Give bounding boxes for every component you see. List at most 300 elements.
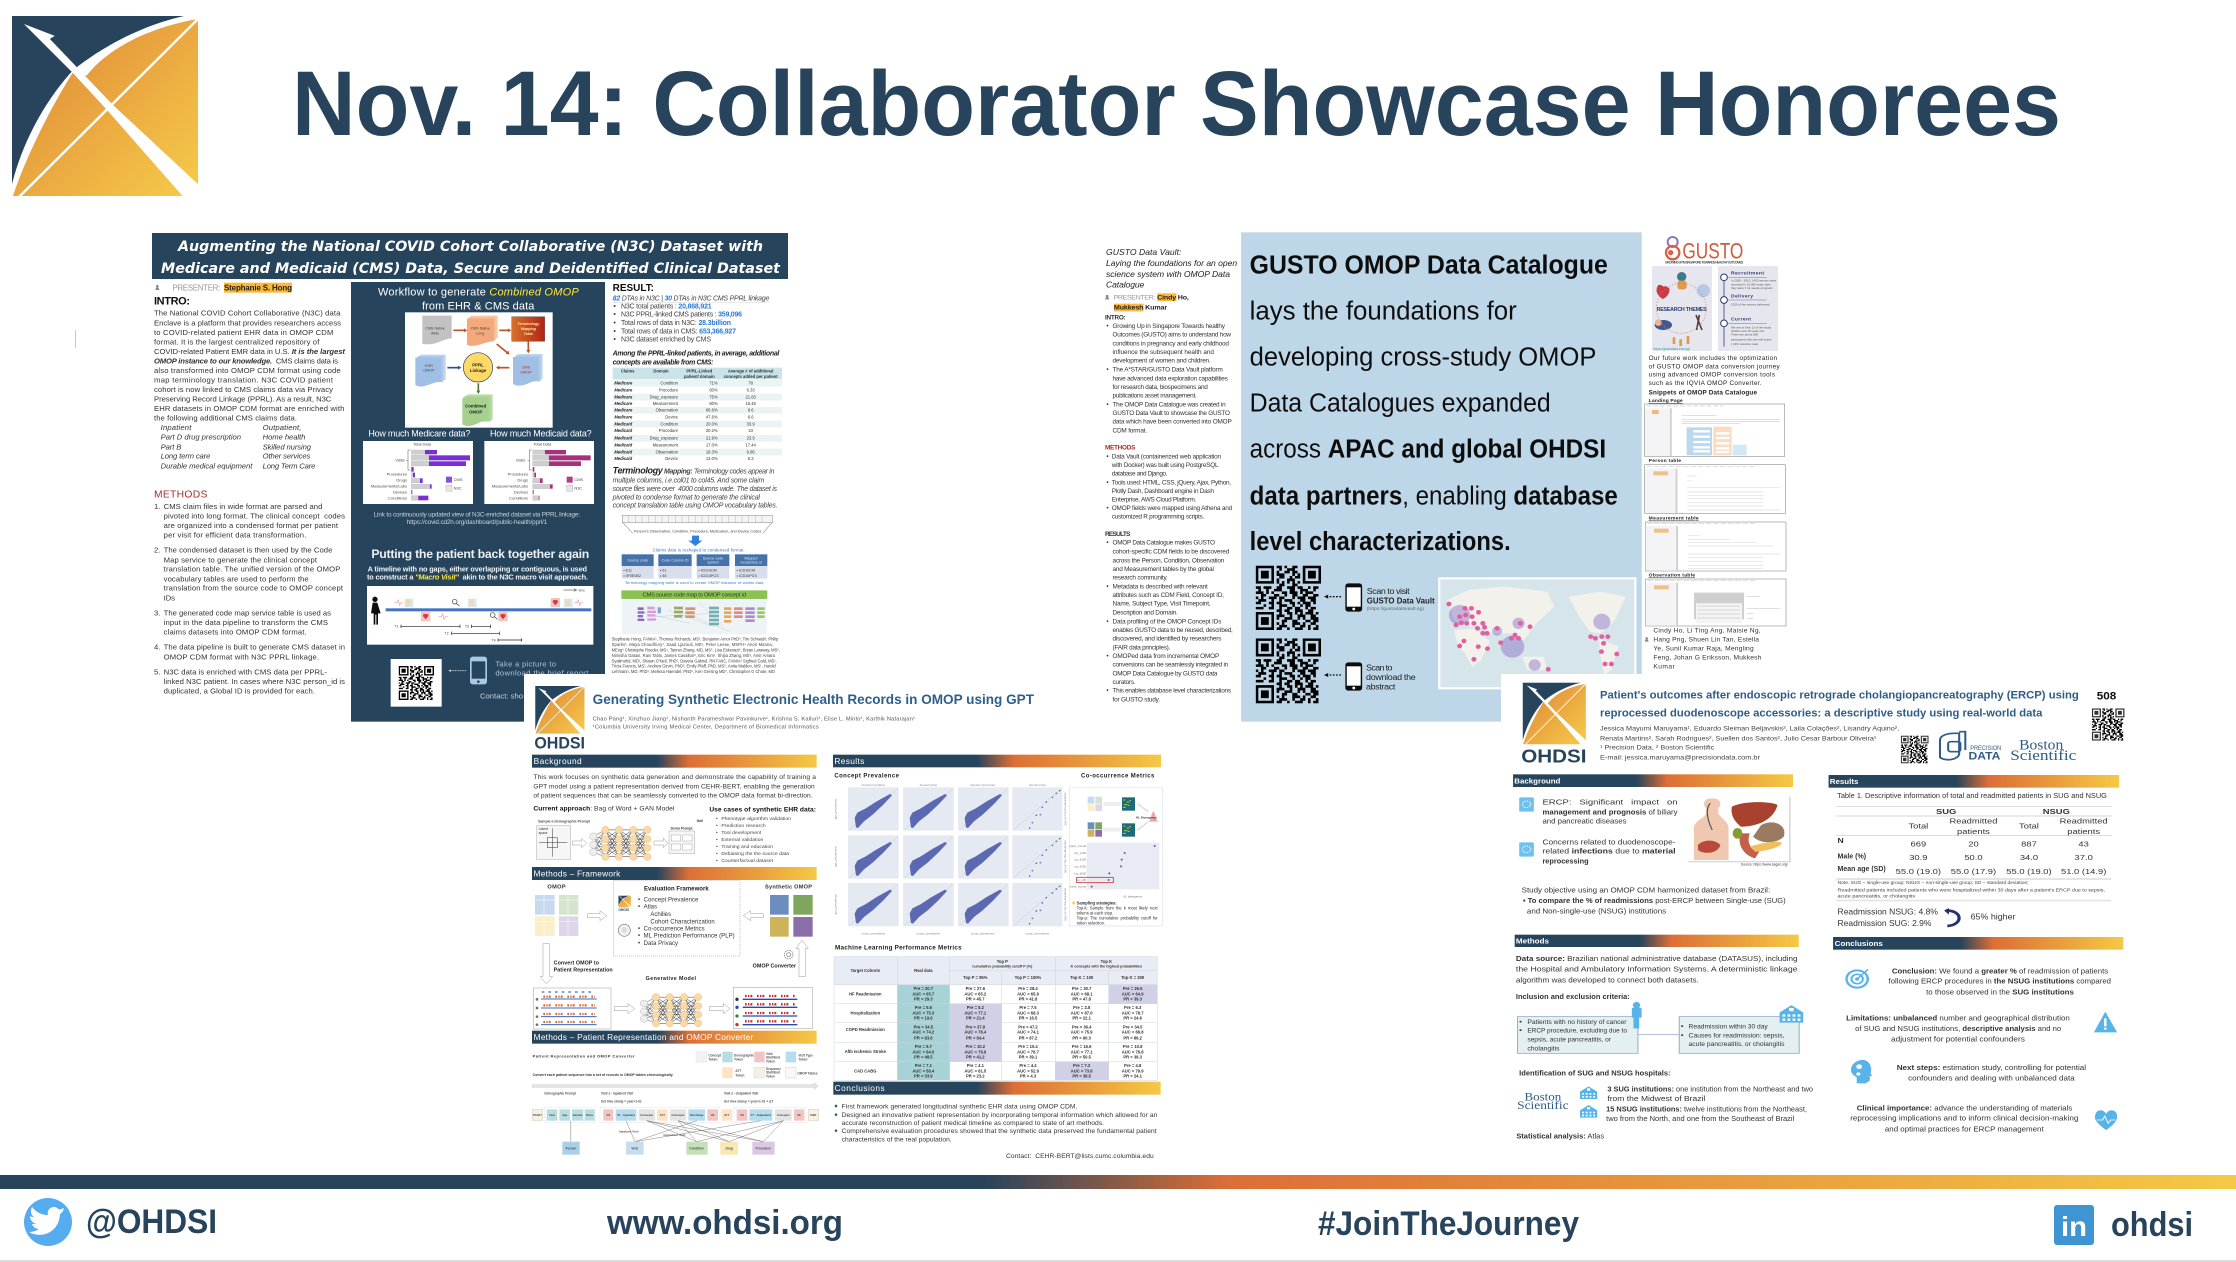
table: ml performance metrics: AUC = 64.9 <box>1122 991 1144 996</box>
token sequence: VS <box>740 1113 744 1117</box>
table: ml performance metrics: Pre = 36.4 <box>1072 1024 1092 1029</box>
table 1: Note. SUG – single-use group; NSUG – non-single-use group; SD – standard deviation; <box>1838 880 2029 886</box>
table: concepts per domain: 6.3 <box>748 456 754 461</box>
scatter chart grid: concept prevalence: sampling=top-foo_k=100 <box>1063 888 1067 921</box>
workflow heading <box>378 287 579 312</box>
terminology paragraph: source files were over 4000 columns wide. The dataset is <box>613 486 777 493</box>
gusto intro: • <box>1106 323 1109 330</box>
study timeline panel: Current <box>1731 316 1751 322</box>
table: concepts per domain: Procedure <box>659 387 679 392</box>
table: ml performance metrics: AUC = 77.1 <box>1071 1049 1093 1054</box>
results bar <box>1829 775 2119 788</box>
poster 4 title: Patient's outcomes after endoscopic retrograde cholangiopancreatography (ERCP) using <box>1600 688 2079 701</box>
terminology mapping diagram: • 0F0E0B2 <box>623 574 641 578</box>
methods bar: Methods <box>1516 937 1549 945</box>
co-occurrence panel: upper_bound <box>1069 844 1086 848</box>
token sequence: Concepts <box>640 1113 654 1117</box>
table: ml performance metrics: PR = 29.3 <box>914 997 933 1002</box>
conclusions list: First framework generated longitudinal synthetic EHR data using OMOP CDM. <box>842 1103 1077 1110</box>
methods list: N3C data is enriched with CMS data per PPRL- <box>164 667 327 676</box>
patient timeline diagram: T3 <box>465 625 469 629</box>
table: concepts per domain: Observation <box>656 408 679 413</box>
table 1: 887 <box>2021 840 2037 848</box>
table: concepts per domain: 71% <box>709 381 718 386</box>
gusto intro: Outcomes (GUSTO) aims to understand how <box>1112 332 1232 339</box>
background text: and pancreatic diseases <box>1542 817 1627 825</box>
generative model network <box>640 994 702 1027</box>
table: ml performance metrics: AUC = 76.7 <box>1017 1049 1040 1054</box>
authors: Lehmann, MD, PhD¹, Melissa Haendel, PhD⁶, Ken Gersing MD⁷, Christopher G Chute, MD <box>612 669 775 674</box>
limitations <box>1846 1012 2117 1043</box>
future work paragraph: Our future work includes the optimization <box>1649 355 1777 362</box>
conclusion statement: Conclusion: We found a greater % of readmission of patients <box>1892 967 2108 975</box>
conclusions list: Comprehensive evaluation procedures showed that the synthetic data preserved the fundamental patient <box>842 1128 1157 1135</box>
co-occurrence panel: KL Divergence <box>1136 815 1157 819</box>
gusto results: curators. <box>1112 679 1136 686</box>
workflow diagram: Mapping <box>521 327 537 331</box>
next steps: Next steps: estimation study, controlling for potential <box>1897 1064 2086 1072</box>
intro list <box>161 423 315 470</box>
limitations: adjustment for potential confounders <box>1891 1035 2025 1043</box>
table: ml performance metrics: Pre = 30.7 <box>1072 986 1092 991</box>
use case list: Tool development <box>721 830 762 836</box>
table: ml performance metrics: Pre = 10.8 <box>1123 1044 1143 1049</box>
intro body: to COVID-related patient EHR data in OMOP CDM <box>154 328 333 337</box>
methods list: claims datasets into OMOP CDM format. <box>164 628 307 637</box>
gusto right column <box>1645 237 1786 671</box>
token legend: Token <box>798 1058 807 1062</box>
table: ml performance metrics: PR = 41.8 <box>1019 997 1038 1002</box>
table 1: SUG <box>1936 807 1957 816</box>
bar chart: medicare <box>363 441 473 504</box>
intro body: Enclave is a platform that provides researchers access <box>154 318 341 327</box>
gusto poster title: science system with OMOP Data <box>1106 269 1230 279</box>
token sequence: ATT <box>660 1113 665 1117</box>
table 1: Mean age (SD) <box>1838 865 1886 873</box>
co-occurrence panel: top_p100 <box>1074 851 1086 855</box>
ohdsi logo <box>1521 683 1587 767</box>
authors: Tricia Francis, MS¹, Andrew Girvin, PhD³, Emily Pfaff, PhD, MS⁵, Anita Walden, MS¹, Harold <box>612 664 776 669</box>
patient timeline diagram: T1 <box>395 625 399 629</box>
clinical importance <box>1850 1104 2117 1133</box>
table: concepts per domain: Observation <box>656 449 679 454</box>
precision data logo: PRECISION <box>1970 744 2001 752</box>
table: ml performance metrics: Pre = 7.1 <box>915 1063 933 1068</box>
qr: precision data <box>1901 736 1929 763</box>
study timeline panel: recruited in 10,000 study sites <box>1731 282 1771 286</box>
results headings <box>834 774 1155 780</box>
poster: N3C CMS augmentation <box>152 233 788 722</box>
table: concepts per domain: Measurement <box>653 442 679 447</box>
result metrics: • <box>613 310 616 319</box>
gusto methods: • <box>1106 480 1109 486</box>
table: ml performance metrics: AUC = 87.0 <box>1071 1010 1093 1015</box>
poster 1 title banner <box>152 233 788 279</box>
scatter chart grid: concept prevalence: omop_prevalence <box>971 931 995 935</box>
table: ml performance metrics: AUC = 77.1 <box>964 1010 987 1015</box>
identification of hospitals: from the Midwest of Brazil <box>1607 1095 1706 1103</box>
table: ml performance metrics: AUC = 68.1 <box>1071 991 1093 996</box>
gusto results: attributes such as CDM Field, Concept ID, <box>1112 592 1224 599</box>
evaluation framework box: OHDSI <box>618 908 629 912</box>
scan labels: download the <box>1366 672 1416 682</box>
gusto presenter: Mukkesh Kumar <box>1114 305 1167 312</box>
study timeline panel: Recruitment <box>1731 271 1764 277</box>
table: ml performance metrics: PR = 22.1 <box>1072 1016 1092 1021</box>
gusto results: OMOPed data from incremental OMOP <box>1112 653 1219 660</box>
intro body: EHR datasets in OMOP CDM format are enriched with <box>154 404 344 413</box>
table: ml performance metrics: AUC = 81.5 <box>964 1068 987 1073</box>
token legend: Start/End <box>766 1071 780 1075</box>
table 1: 43 <box>2078 840 2089 848</box>
take a picture text <box>480 659 589 701</box>
framework labels: Generative Model <box>646 976 697 982</box>
background section bar: Background <box>534 756 582 766</box>
criteria flow: Causes for readmission: sepsis, <box>1689 1031 1784 1039</box>
screenshot: measurement table <box>1645 515 1786 571</box>
background text <box>533 774 816 814</box>
terminology mapping diagram: Code Column ID <box>661 559 689 563</box>
token legend: Token <box>708 1058 717 1062</box>
footer gradient band <box>0 1175 2236 1189</box>
gusto methods: Tools used: HTML, CSS, jQuery, Ajax, Python, <box>1112 480 1231 486</box>
gusto intro: conditions in pregnancy and early childhood <box>1112 341 1229 347</box>
gusto authors: Hang Png, Shuen Lin Tan, Estella <box>1653 637 1759 644</box>
gusto results: OMOP Data Catalogue by GUSTO data <box>1112 671 1218 677</box>
data source: Data source: Brazilian national administrative database (DATASUS), including <box>1516 954 1798 963</box>
future work paragraph: such as the IQVIA OMOP Converter. <box>1649 380 1762 387</box>
criteria flow: cholangitis <box>1527 1044 1560 1052</box>
gusto main statement: GUSTO OMOP Data Catalogue <box>1250 250 1608 279</box>
co-occurrence panel: Top-p: The cumulative probability cutoff for <box>1077 916 1158 921</box>
workflow diagram: Terminology <box>517 322 540 326</box>
gusto blue centre panel <box>1241 232 1642 722</box>
table: concepts per domain: Medicare <box>614 381 633 386</box>
methods list: vocabulary tables are used to perform the <box>164 574 309 583</box>
medicare medicaid headings: How much Medicaid data? <box>490 429 592 439</box>
bar chart: medicare: Conditions <box>388 495 407 500</box>
scan labels: abstract <box>1366 682 1396 692</box>
table: ml performance metrics: Pre = 28.4 <box>1018 986 1038 991</box>
terminology mapping diagram: Source code <box>627 559 648 563</box>
co-occurrence panel: Top-k: Sample from the k most likely next <box>1077 906 1159 911</box>
gusto results: conversions can be seamlessly integrated in <box>1112 662 1229 669</box>
world map of data partners <box>1439 578 1635 688</box>
table: ml performance metrics: HF Readmission <box>849 991 882 996</box>
table: ml performance metrics: PR = 24.6 <box>1123 1016 1143 1021</box>
token legend: Sequence <box>766 1067 781 1071</box>
table: ml performance metrics: AUC = 73.6 <box>1071 1068 1093 1073</box>
table 1: acute pancreatitis, or cholangitis <box>1838 894 1916 899</box>
table 1: patients <box>2067 827 2100 836</box>
token sequence: VT - Inpatient <box>617 1113 635 1117</box>
table: concepts per domain: 6.33 <box>747 387 755 392</box>
identification of hospitals: 3 SUG institutions: one institution from the Northeast and two <box>1607 1085 1814 1093</box>
screenshot: observation table: Observation table <box>1649 572 1695 578</box>
table: ml performance metrics: Top K = 300 <box>1121 975 1145 980</box>
future work paragraph: of GUSTO OMOP data conversion journey <box>1649 363 1780 370</box>
gusto methods: Plotly Dash, Dashboard engine in Dash <box>1112 488 1214 495</box>
criteria flow: Readmission within 30 day <box>1689 1022 1768 1030</box>
scatter chart grid: concept prevalence: sampling=top-foo_k=100 <box>1063 793 1067 826</box>
token legend: Start/End <box>766 1056 780 1060</box>
methods list: The condensed dataset is then used by the Code <box>164 546 332 555</box>
table 1: Readmitted <box>2060 817 2108 825</box>
gusto presenter: PRESENTER: <box>1114 295 1155 301</box>
authors: Sparks¹, Maya Choudhury¹, Saad Ljazouli, MS¹, Peter Leese, MSPH⁴ Anoir Manna, <box>612 642 773 647</box>
gusto methods: with Docker) was built using PostgreSQL <box>1111 462 1219 469</box>
workflow heading: Workflow to generate Combined OMOP <box>378 287 579 299</box>
table: concepts per domain: Condition <box>660 381 679 386</box>
patient timeline diagram: T2 <box>445 632 449 636</box>
ohdsi logo <box>534 686 585 753</box>
qr: data vault <box>1256 566 1321 630</box>
terminology paragraph: Terminology Mapping: Terminology codes appear in <box>613 466 774 476</box>
intro body: Preserving Record Linkage (PPRL). As a result, N3C <box>154 395 332 404</box>
table: ml performance metrics: PR = 33.9 <box>914 1074 933 1079</box>
table: ml performance metrics: AUC = 78.7 <box>1122 1010 1144 1015</box>
token sequence: Concepts <box>672 1113 685 1117</box>
bar chart: medicare: Procedures <box>387 472 407 477</box>
boston scientific logo: Scientific <box>2010 747 2076 764</box>
synthetic omop tables <box>765 884 813 937</box>
token legend: Token <box>766 1074 775 1078</box>
ml performance heading: Machine Learning Performance Metrics <box>835 945 962 952</box>
methods list: input in the data pipeline to transform the CMS <box>164 618 328 627</box>
scan labels: (https://gustodatavault.sg) <box>1367 606 1424 612</box>
table: concepts per domain: Medicaid <box>614 436 633 441</box>
evaluation framework box: • <box>638 941 640 947</box>
workflow diagram: Linkage <box>470 368 487 373</box>
token sequence: Year <box>549 1113 556 1117</box>
criteria flow: • <box>1519 1026 1522 1034</box>
table: concepts per domain: 21.83 <box>745 394 757 399</box>
table 1: Table 1. Descriptive information of total and readmitted patients in SUG and NSUG <box>1837 791 2107 800</box>
background text: management and prognosis of biliary <box>1542 807 1678 816</box>
intro list: Other services <box>263 452 311 461</box>
study timeline panel: We are at Year 13 of the study <box>1731 325 1772 329</box>
gusto intro: Growing Up in Singapore Towards healthy <box>1112 323 1226 330</box>
gusto poster title: Catalogue <box>1106 280 1145 290</box>
ohdsi logo: OHDSI <box>534 734 585 753</box>
table: ml performance metrics: Top P = 100% <box>1015 975 1042 980</box>
study objective <box>1522 885 1786 915</box>
terminology mapping diagram: • ICD10PCS <box>698 574 719 578</box>
gusto results: Metadata is described with relevant <box>1112 584 1208 590</box>
table: ml performance metrics: AUC = 79.9 <box>1122 1068 1144 1073</box>
terminology mapping diagram: Claims data is reshaped to condensed format. <box>653 548 745 553</box>
token legend: Concept <box>708 1053 722 1057</box>
methods bar <box>1515 935 1799 947</box>
table: ml performance metrics: AfIb Ischemic Stroke <box>845 1049 887 1054</box>
methods list: are organized into a condensed format per patient <box>164 521 339 530</box>
table: ml performance metrics: Top K <box>1101 959 1112 964</box>
omop table mapping: Visit <box>631 1146 639 1150</box>
table: ml performance metrics: AUC = 52.9 <box>1017 1068 1040 1073</box>
poster: synthetic EHR with GPT <box>524 674 1163 1175</box>
among ppri statement <box>612 351 780 366</box>
gusto intro: The OMOP Data Catalogue was created in <box>1112 402 1226 408</box>
ohdsi logo: OHDSI <box>1521 747 1587 767</box>
table: ml performance metrics: PR = 39.3 <box>1123 997 1143 1002</box>
use case list: • <box>716 816 718 822</box>
table: concepts per domain: Medicare <box>614 408 633 413</box>
table: concepts per domain: 6.85 <box>747 449 755 454</box>
table: ml performance metrics: Pre = 4.1 <box>967 1063 985 1068</box>
background text: Use cases of synthetic EHR data: <box>709 807 816 814</box>
table 1: 51.0 (14.9) <box>2061 867 2107 876</box>
cms source code map: CMS source code map to OMOP concept id <box>643 593 746 599</box>
data source <box>1516 954 1798 1001</box>
current approach diagram: Gail <box>697 819 703 823</box>
study objective: Study objective using an OMOP CDM harmonized dataset from Brazil: <box>1522 885 1770 894</box>
framework labels: OMOP Converter <box>753 963 796 969</box>
timeline description <box>367 564 588 582</box>
gusto poster title: GUSTO Data Vault: <box>1106 247 1181 257</box>
table: ml performance metrics: AUC = 84.0 <box>912 1049 935 1054</box>
table: ml performance metrics: Pre = 7.5 <box>1019 1005 1037 1010</box>
table 1: 669 <box>1911 840 1926 848</box>
table: ml performance metrics: PR = 23.2 <box>966 1074 985 1079</box>
background icons <box>1519 797 1534 857</box>
workflow diagram: Combined <box>465 404 487 409</box>
study objective: and Non-single-use (NSUG) institutions <box>1527 906 1666 915</box>
table: concepts per domain: Medicare <box>614 387 633 392</box>
scatter chart grid: concept prevalence: omop_prevalence <box>861 931 886 935</box>
evaluation framework box: Atlas <box>644 905 657 911</box>
limitations: Limitations: unbalanced number and geographical distribution <box>1846 1014 2070 1022</box>
table: concepts per domain: Medicaid <box>614 421 633 426</box>
terminology mapping diagram: • 01 <box>660 569 666 573</box>
workflow heading: from EHR & CMS data <box>422 300 535 312</box>
result heading: RESULT: <box>613 283 654 294</box>
table: ml performance metrics: COPD Readmission <box>846 1027 885 1032</box>
scatter chart grid: concept prevalence: omop_prevalence <box>1025 931 1050 935</box>
table: concepts per domain: Device <box>665 456 679 461</box>
table: ml performance metrics: Pre = 34.5 <box>914 1024 934 1029</box>
evaluation framework box: Co-occurrence Metrics <box>644 926 705 932</box>
table: concepts per domain: 18.48 <box>745 401 757 406</box>
poster 1 dark centre panel <box>351 282 605 722</box>
bar chart: medicare: Total Data <box>413 442 432 447</box>
evaluation framework box: Data Privacy <box>644 941 678 947</box>
table: ml performance metrics: PR = 24.1 <box>1123 1074 1143 1079</box>
intro body: COVID-related Patient EMR data in U.S. It is the largest <box>154 347 345 356</box>
table: ml performance metrics: Pre = 2.8 <box>1073 1005 1091 1010</box>
intro list: Long Term Care <box>263 461 315 470</box>
gusto intro: INTRO: <box>1105 315 1126 321</box>
gusto results: for GUSTO study. <box>1112 697 1160 703</box>
bar chart: medicare: N3C <box>454 486 462 491</box>
authors <box>612 637 780 674</box>
study timeline panel: There are about 800 <box>1731 333 1758 337</box>
table 1: 50.0 <box>1964 853 1983 862</box>
gusto logo <box>1665 237 1744 264</box>
table: ml performance metrics: AUC = 75.3 <box>912 1010 935 1015</box>
omop table mapping: Procedure <box>756 1146 771 1150</box>
token sequence: Visit 2 - Outpatient Visit <box>724 1091 759 1095</box>
putting patient together heading: Putting the patient back together again <box>371 547 589 561</box>
gusto intro: publications asset management. <box>1112 393 1197 400</box>
identification of hospitals <box>1516 1069 1814 1140</box>
background text: of patient sequences that can be seamlessly converted to the OMOP data format bi-direction. <box>533 793 813 800</box>
co-occurrence panel: token selection. <box>1077 920 1105 925</box>
table 1: 34.0 <box>2020 853 2038 862</box>
research themes panel: RESEARCH THEMES <box>1657 307 1707 313</box>
converter captions: Patient Representation and OMOP Converter <box>533 1053 635 1058</box>
omop table mapping: Person <box>566 1146 576 1150</box>
table: ml performance metrics: PR = 87.2 <box>1019 1035 1038 1040</box>
bar chart: medicaid: Conditions <box>509 495 528 500</box>
scatter chart grid: concept prevalence: domain=drug <box>920 783 937 787</box>
bar chart: medicare: Devices <box>393 490 407 495</box>
gusto authors: Feng, Johan G Eriksson, Mukkesh <box>1653 655 1762 662</box>
table: concepts per domain: Medicaid <box>614 449 633 454</box>
gusto intro: • <box>1106 367 1109 373</box>
table: concepts per domain: Medicaid <box>614 428 633 433</box>
table: concepts per domain: Medicare <box>614 414 633 419</box>
gusto intro: GUSTO Data Vault to showcase the GUSTO <box>1112 410 1230 417</box>
result metrics <box>613 296 769 344</box>
limitations: of SUG and NSUG institutions, descriptive analysis and no <box>1855 1025 2062 1033</box>
gusto methods: Enterprise, AWS Cloud Platform. <box>1112 497 1197 503</box>
token sequence: Age <box>562 1113 568 1117</box>
gusto methods: customized R programming scripts. <box>1112 514 1205 521</box>
intro heading: INTRO: <box>154 296 190 308</box>
table: ml performance metrics: Pre = 37.8 <box>966 1024 986 1029</box>
bar chart: medicaid: Visits <box>516 458 525 463</box>
gusto presenter: Cindy Ho, <box>1157 295 1189 301</box>
methods list: The generated code map service table is used as <box>164 609 331 618</box>
gusto results: across the Person, Condition, Observation <box>1112 558 1225 564</box>
intro body: cohort is now linked to CMS claims data via Privacy <box>154 385 333 394</box>
gusto results <box>1105 531 1233 703</box>
criteria flow: acute pancreatitis, or cholangitis <box>1689 1040 1785 1048</box>
table: ml performance metrics: Pre = 16.6 <box>1072 1044 1092 1049</box>
result metrics: • <box>613 335 616 344</box>
abstract number: 508 <box>2097 690 2116 702</box>
table: ml performance metrics: Pre = 10.4 <box>1018 1044 1038 1049</box>
gusto authors <box>1645 628 1762 671</box>
scan labels: GUSTO Data Vault <box>1367 596 1435 606</box>
footer: website: www.ohdsi.org <box>606 1204 843 1242</box>
table: concepts per domain: patient/ domain <box>684 374 715 379</box>
use case list <box>716 816 791 864</box>
scatter chart grid: concept prevalence: gpt_prevalence <box>833 846 837 867</box>
table 1: NSUG <box>2043 807 2070 816</box>
omop table mapping: Inpatient Visit <box>619 1129 639 1133</box>
gusto intro: influence the subsequent health and <box>1112 349 1214 356</box>
result metrics: N3C total patients : 20,868,921 <box>621 304 712 311</box>
use case list: Prediction research <box>721 823 766 829</box>
presenter line: Stephanie S. Hong <box>224 284 292 293</box>
data source: Inclusion and exclusion criteria: <box>1516 992 1630 1001</box>
table: ml performance metrics: PR = 19.6 <box>914 1016 933 1021</box>
gusto poster title <box>1106 247 1238 290</box>
workflow diagram: EHR <box>425 364 433 368</box>
methods list: Map service to generate the clinical concept <box>164 555 318 564</box>
gusto results: • <box>1106 653 1109 660</box>
omop table mapping: Outpatient Visit <box>663 1133 685 1137</box>
precision data logo <box>1940 732 2001 762</box>
future work paragraph: using advanced OMOP conversion tools <box>1649 372 1775 379</box>
research themes panel: https://gustodata.edu.sg/ <box>1653 347 1690 351</box>
gusto intro: • <box>1106 402 1109 408</box>
evaluation framework box: Cohort Characterization <box>650 919 715 925</box>
study timeline panel <box>1718 266 1778 351</box>
data source: algorithm was developed to connect both datasets. <box>1516 975 1699 984</box>
screenshot: landing page <box>1645 398 1785 456</box>
